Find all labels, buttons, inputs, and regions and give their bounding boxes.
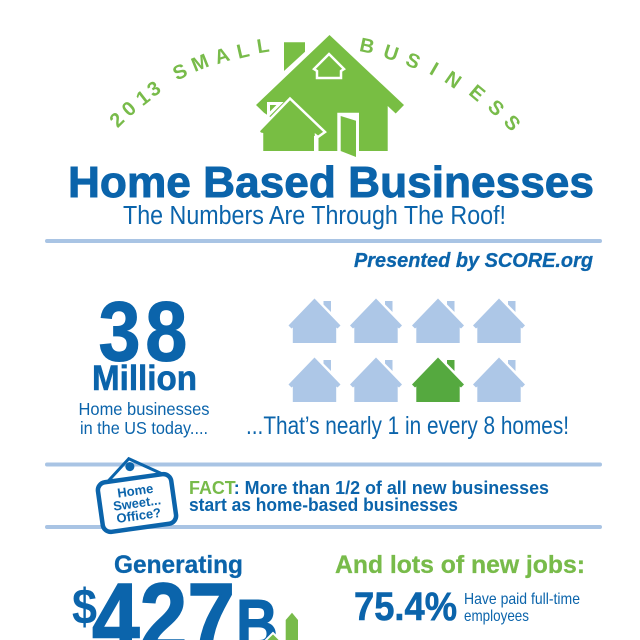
- house pictogram: 1 in 8: [288, 298, 525, 402]
- arched heading: 2013 small business: M: [188, 50, 212, 77]
- jobs description: employees: [464, 608, 529, 625]
- stat: 38 million: Million: [92, 359, 197, 398]
- fact text: [189, 477, 549, 515]
- arched heading: 2013 small business: E: [464, 81, 489, 106]
- arched heading: 2013 small business: B: [358, 34, 376, 59]
- open door: [337, 113, 359, 151]
- dormer window: [314, 54, 344, 78]
- chimney: [284, 42, 305, 71]
- fact text: start as home-based businesses: [189, 494, 458, 515]
- main house body: [256, 35, 404, 151]
- arched heading: 2013 small business: [106, 34, 524, 136]
- arched heading: 2013 small business: 1: [132, 86, 154, 110]
- arched heading: 2013 small business: I: [426, 59, 442, 80]
- sign icon: home sweet office: Home: [116, 481, 154, 501]
- sign icon: home sweet office: [94, 453, 177, 533]
- revenue stat: $: [72, 579, 97, 635]
- stat: 38 million: 38: [98, 285, 187, 378]
- arched heading: 2013 small business: L: [235, 39, 252, 64]
- divider: [45, 525, 602, 529]
- jobs heading: And lots of new jobs:: [335, 551, 585, 579]
- jobs description: Have paid full-time: [464, 591, 580, 608]
- growth arrow: [286, 613, 298, 640]
- arched heading: 2013 small business: U: [381, 41, 401, 66]
- side window: [268, 104, 280, 115]
- generating heading: Generating: [114, 551, 243, 579]
- jobs stat: 75.4%: [354, 585, 457, 629]
- stat: 38 million: in the US today....: [80, 418, 208, 438]
- sign icon: home sweet office: Office?: [116, 505, 162, 526]
- jobs description: [464, 591, 580, 625]
- presenter credit: Presented by SCORE.org: [354, 250, 593, 272]
- stat: 38 million: [78, 285, 210, 438]
- arched heading: 2013 small business: S: [402, 49, 423, 74]
- arched heading: 2013 small business: S: [170, 60, 191, 85]
- fact text: FACT: More than 1/2 of all new businesses: [189, 477, 549, 498]
- divider: [45, 239, 602, 243]
- sign icon: home sweet office: Sweet...: [112, 492, 162, 514]
- arched heading: 2013 small business: A: [212, 44, 232, 69]
- green house logo: [256, 35, 404, 157]
- stat: 38 million: Home businesses: [78, 399, 210, 419]
- arched heading: 2013 small business: 2: [106, 109, 129, 132]
- arched heading: 2013 small business: S: [499, 111, 524, 136]
- divider: [45, 462, 602, 466]
- arched heading: 2013 small business: L: [255, 35, 271, 58]
- title: Home Based Businesses: [68, 158, 594, 207]
- small green house: [264, 633, 282, 640]
- subtitle: The Numbers Are Through The Roof!: [123, 202, 506, 230]
- arched heading: 2013 small business: S: [483, 96, 508, 121]
- arched heading: 2013 small business: 0: [118, 97, 141, 121]
- small front house: [258, 98, 325, 152]
- arched heading: 2013 small business: N: [440, 67, 465, 94]
- pictogram caption: ...That’s nearly 1 in every 8 homes!: [246, 412, 569, 440]
- arched heading: 2013 small business: 3: [144, 77, 165, 102]
